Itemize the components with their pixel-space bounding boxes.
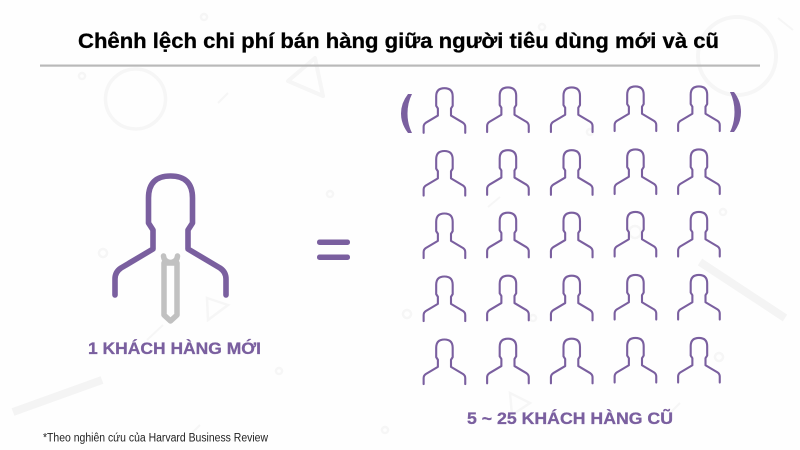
icon: tie (164, 256, 178, 321)
icon: closing bracket (730, 92, 741, 132)
icon: equals sign (317, 240, 350, 260)
label: 1 new customer: 1 KHÁCH HÀNG MỚI (88, 339, 261, 358)
icon: new customer with tie (115, 176, 226, 321)
icon: opening bracket (401, 94, 412, 133)
icon grid: existing customers (424, 86, 720, 384)
title: Chênh lệch chi phí bán hàng giữa người tiêu dùng mới và cũ (78, 30, 719, 53)
footnote: *Theo nghiên cứu của Harvard Business Review (43, 432, 269, 444)
label: 5 to 25 existing customers: 5 ~ 25 KHÁCH HÀNG CŨ (467, 408, 673, 428)
